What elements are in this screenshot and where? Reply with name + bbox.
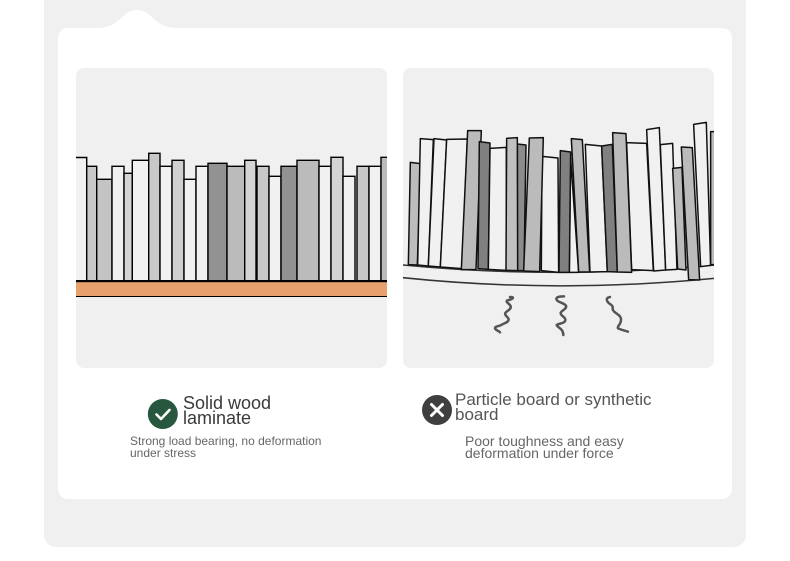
heading: particle board or synthetic board: Particle board or synthetic [455, 390, 652, 409]
leaning books [408, 122, 717, 280]
panel: particle board illustration [403, 68, 717, 368]
stress squiggles [495, 296, 628, 335]
orange solid wood board [76, 280, 387, 297]
panel background [76, 68, 387, 368]
panel: solid wood laminate illustration [76, 68, 387, 368]
sagging board and leaning books [403, 122, 717, 286]
heading: particle board or synthetic board: board [455, 405, 498, 424]
books standing straight [76, 153, 387, 281]
caption: solid wood [130, 393, 321, 460]
text: solid wood description: Strong load bearing, no deformation [130, 434, 321, 448]
heading: solid wood laminate: laminate [183, 408, 251, 428]
heading: solid wood laminate: Solid wood [183, 393, 271, 413]
caption: particle board [422, 390, 652, 461]
text: solid wood description: under stress [130, 446, 196, 460]
white card with top bump [58, 10, 732, 499]
panel background [403, 68, 714, 368]
icon: check mark [148, 399, 178, 429]
text: particle board description: deformation under force [465, 445, 614, 461]
icon: cross mark [422, 395, 452, 425]
sagging board [403, 265, 715, 286]
text: particle board description: Poor toughness and easy [465, 433, 624, 449]
